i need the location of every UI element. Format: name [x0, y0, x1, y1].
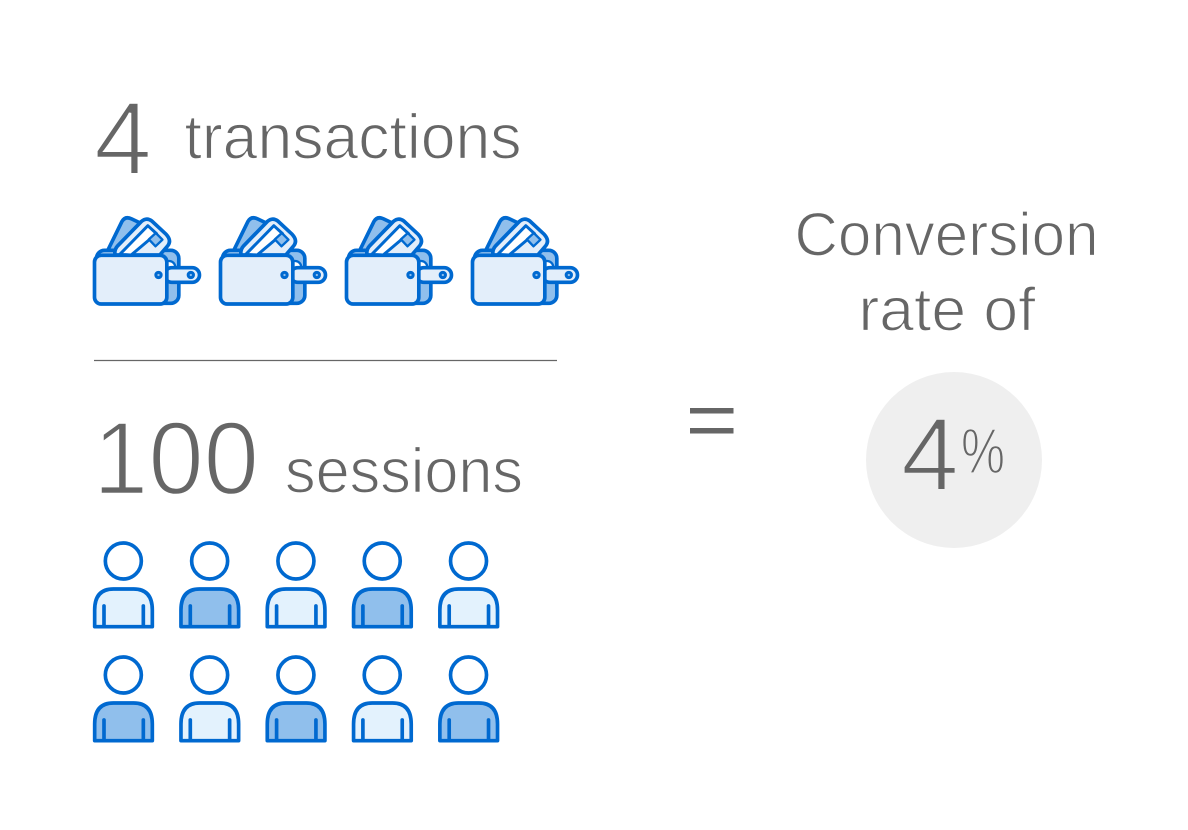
callout: 4 percent circle: [866, 372, 1042, 548]
icons: four wallets: [94, 218, 577, 304]
heading: 4 transactions: 4: [94, 81, 152, 197]
heading: 100 sessions: sessions: [285, 436, 523, 506]
heading: 100 sessions: [93, 401, 523, 517]
equals sign: [690, 408, 734, 434]
callout: 4 percent circle: 4: [901, 397, 959, 513]
label: conversion rate of: [794, 200, 1098, 344]
callout: 4 percent circle: %: [961, 415, 1005, 487]
label: conversion rate of: rate of: [858, 276, 1037, 344]
heading: 100 sessions: 100: [93, 401, 259, 517]
heading: 4 transactions: transactions: [184, 102, 522, 172]
label: conversion rate of: Conversion: [794, 200, 1098, 268]
heading: 4 transactions: [94, 81, 522, 197]
icons: ten people: [95, 543, 498, 741]
